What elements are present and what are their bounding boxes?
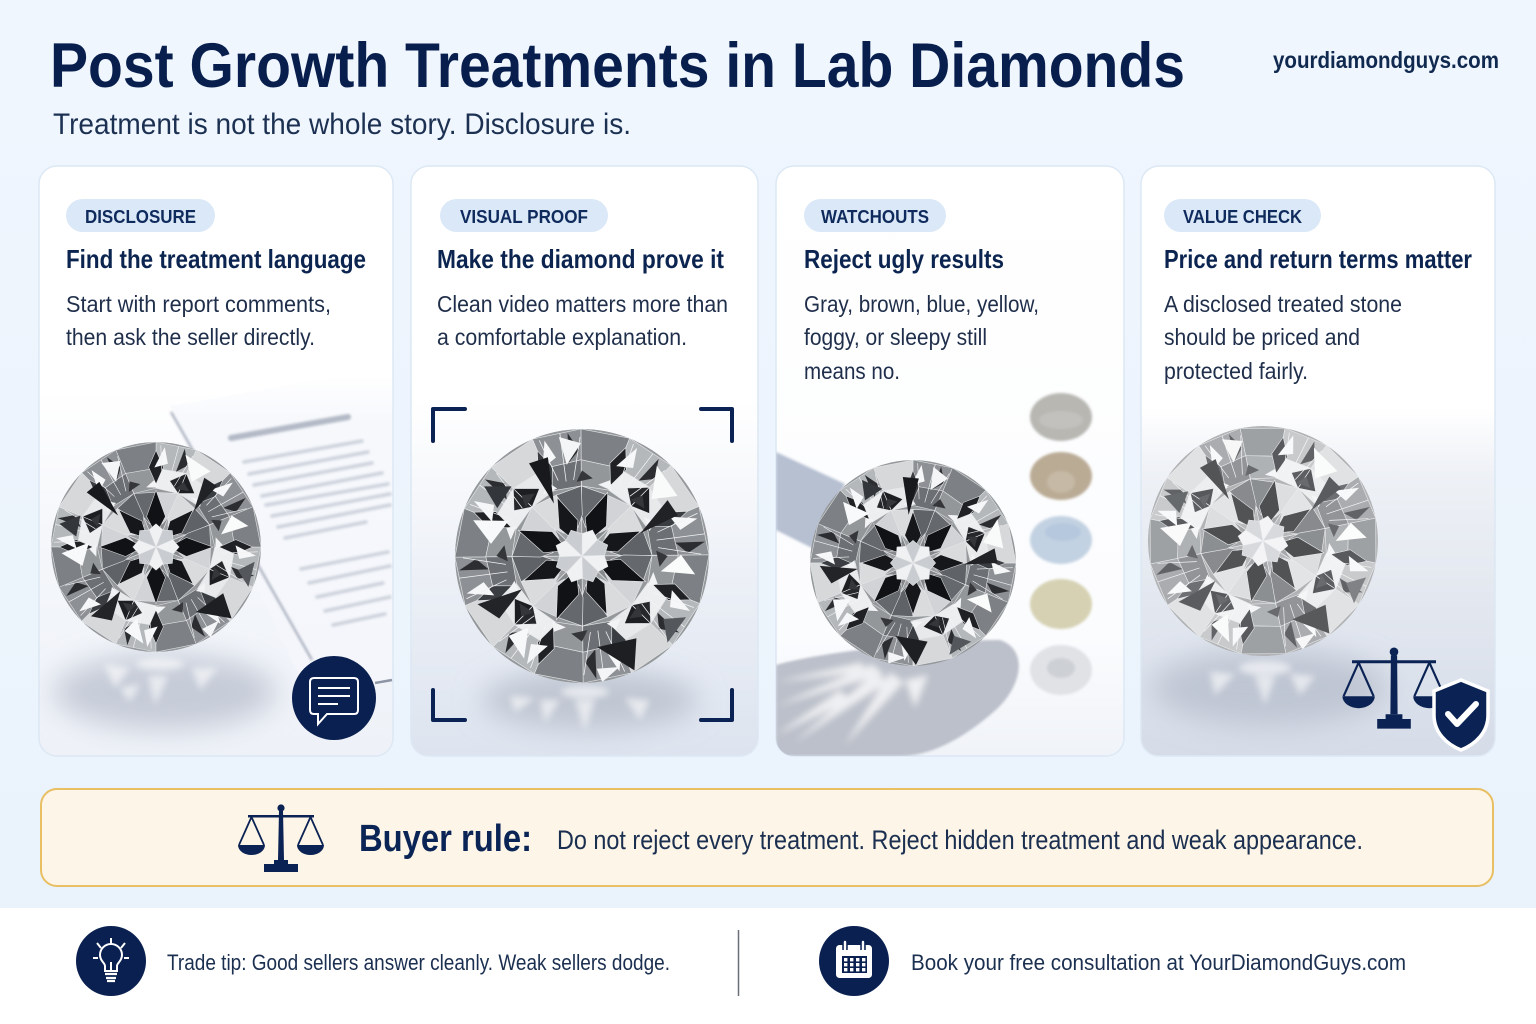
panel: visual proof [411, 166, 758, 756]
body text: A disclosed treated stone [1164, 291, 1402, 317]
title: Post Growth Treatments in Lab Diamonds [50, 31, 1185, 101]
icon: shield with check [1434, 680, 1488, 750]
heading: Reject ugly results [804, 244, 1004, 274]
body text: foggy, or sleepy still [804, 324, 987, 350]
diamond [455, 429, 709, 683]
illustration: diamond with scales and shield [1128, 406, 1488, 750]
body text: should be priced and [1164, 324, 1360, 350]
illustration: diamond with off-colour swatches [767, 393, 1092, 756]
diamond shadow [1152, 650, 1388, 726]
website label: yourdiamondguys.com [1273, 47, 1499, 73]
colour swatches [1030, 393, 1092, 695]
panel: watchouts [767, 166, 1124, 756]
trade tip text: Trade tip: Good sellers answer cleanly. Weak sellers dodge. [167, 950, 670, 975]
tag: disclosure [66, 199, 215, 232]
heading: Make the diamond prove it [437, 244, 724, 274]
tag: disclosure: DISCLOSURE [85, 207, 196, 227]
panel: value check [1128, 166, 1495, 756]
icon: calendar [819, 926, 889, 996]
card background [776, 166, 1124, 756]
body text: Start with report comments, [66, 291, 331, 317]
body text: Clean video matters more than [437, 291, 728, 317]
card background [411, 166, 758, 756]
divider [738, 930, 740, 996]
body text [437, 291, 728, 350]
heading: Price and return terms matter [1164, 244, 1472, 274]
diamond shadow [482, 670, 698, 730]
callout: buyer rule [41, 789, 1493, 886]
diamond lighter tone [1148, 426, 1378, 656]
body text: protected fairly. [1164, 358, 1308, 384]
body text: a comfortable explanation. [437, 324, 687, 350]
hard shadows [776, 452, 1019, 756]
body text: then ask the seller directly. [66, 324, 315, 350]
icon: comment bubble [292, 656, 376, 740]
illustration: diamond in viewfinder [431, 407, 734, 739]
body text [1164, 291, 1402, 384]
buyer rule text: Do not reject every treatment. Reject hidden treatment and weak appearance. [557, 825, 1363, 855]
diamond [51, 442, 261, 652]
body text: means no. [804, 358, 900, 384]
heading: Find the treatment language [66, 244, 366, 274]
subtitle: Treatment is not the whole story. Disclosure is. [53, 108, 631, 141]
tag: visual proof [440, 199, 608, 232]
tag: watchouts: WATCHOUTS [821, 207, 929, 227]
card background [39, 166, 393, 756]
body text [804, 291, 1039, 384]
buyer rule label: Buyer rule: [359, 818, 532, 860]
viewfinder brackets [433, 409, 732, 720]
diamond shadow [53, 654, 277, 730]
diamond [1148, 426, 1378, 656]
body text [66, 291, 331, 350]
icon: scales [238, 804, 324, 872]
footer bar [0, 908, 1536, 1024]
tag: visual proof: VISUAL PROOF [460, 207, 588, 227]
tag: value check [1164, 199, 1321, 232]
report sheet [169, 410, 392, 684]
consultation text: Book your free consultation at YourDiamondGuys.com [911, 950, 1406, 975]
tag: watchouts [804, 199, 946, 232]
callout background [41, 789, 1493, 886]
card background [1141, 166, 1495, 756]
tag: value check: VALUE CHECK [1183, 207, 1302, 227]
footer background [0, 908, 1536, 1024]
body text: Gray, brown, blue, yellow, [804, 291, 1039, 317]
panel: disclosure [39, 166, 393, 756]
illustration: diamond on report [51, 375, 392, 740]
diamond [810, 460, 1016, 666]
icon: light bulb [76, 926, 146, 996]
icon: scales [1342, 647, 1446, 729]
